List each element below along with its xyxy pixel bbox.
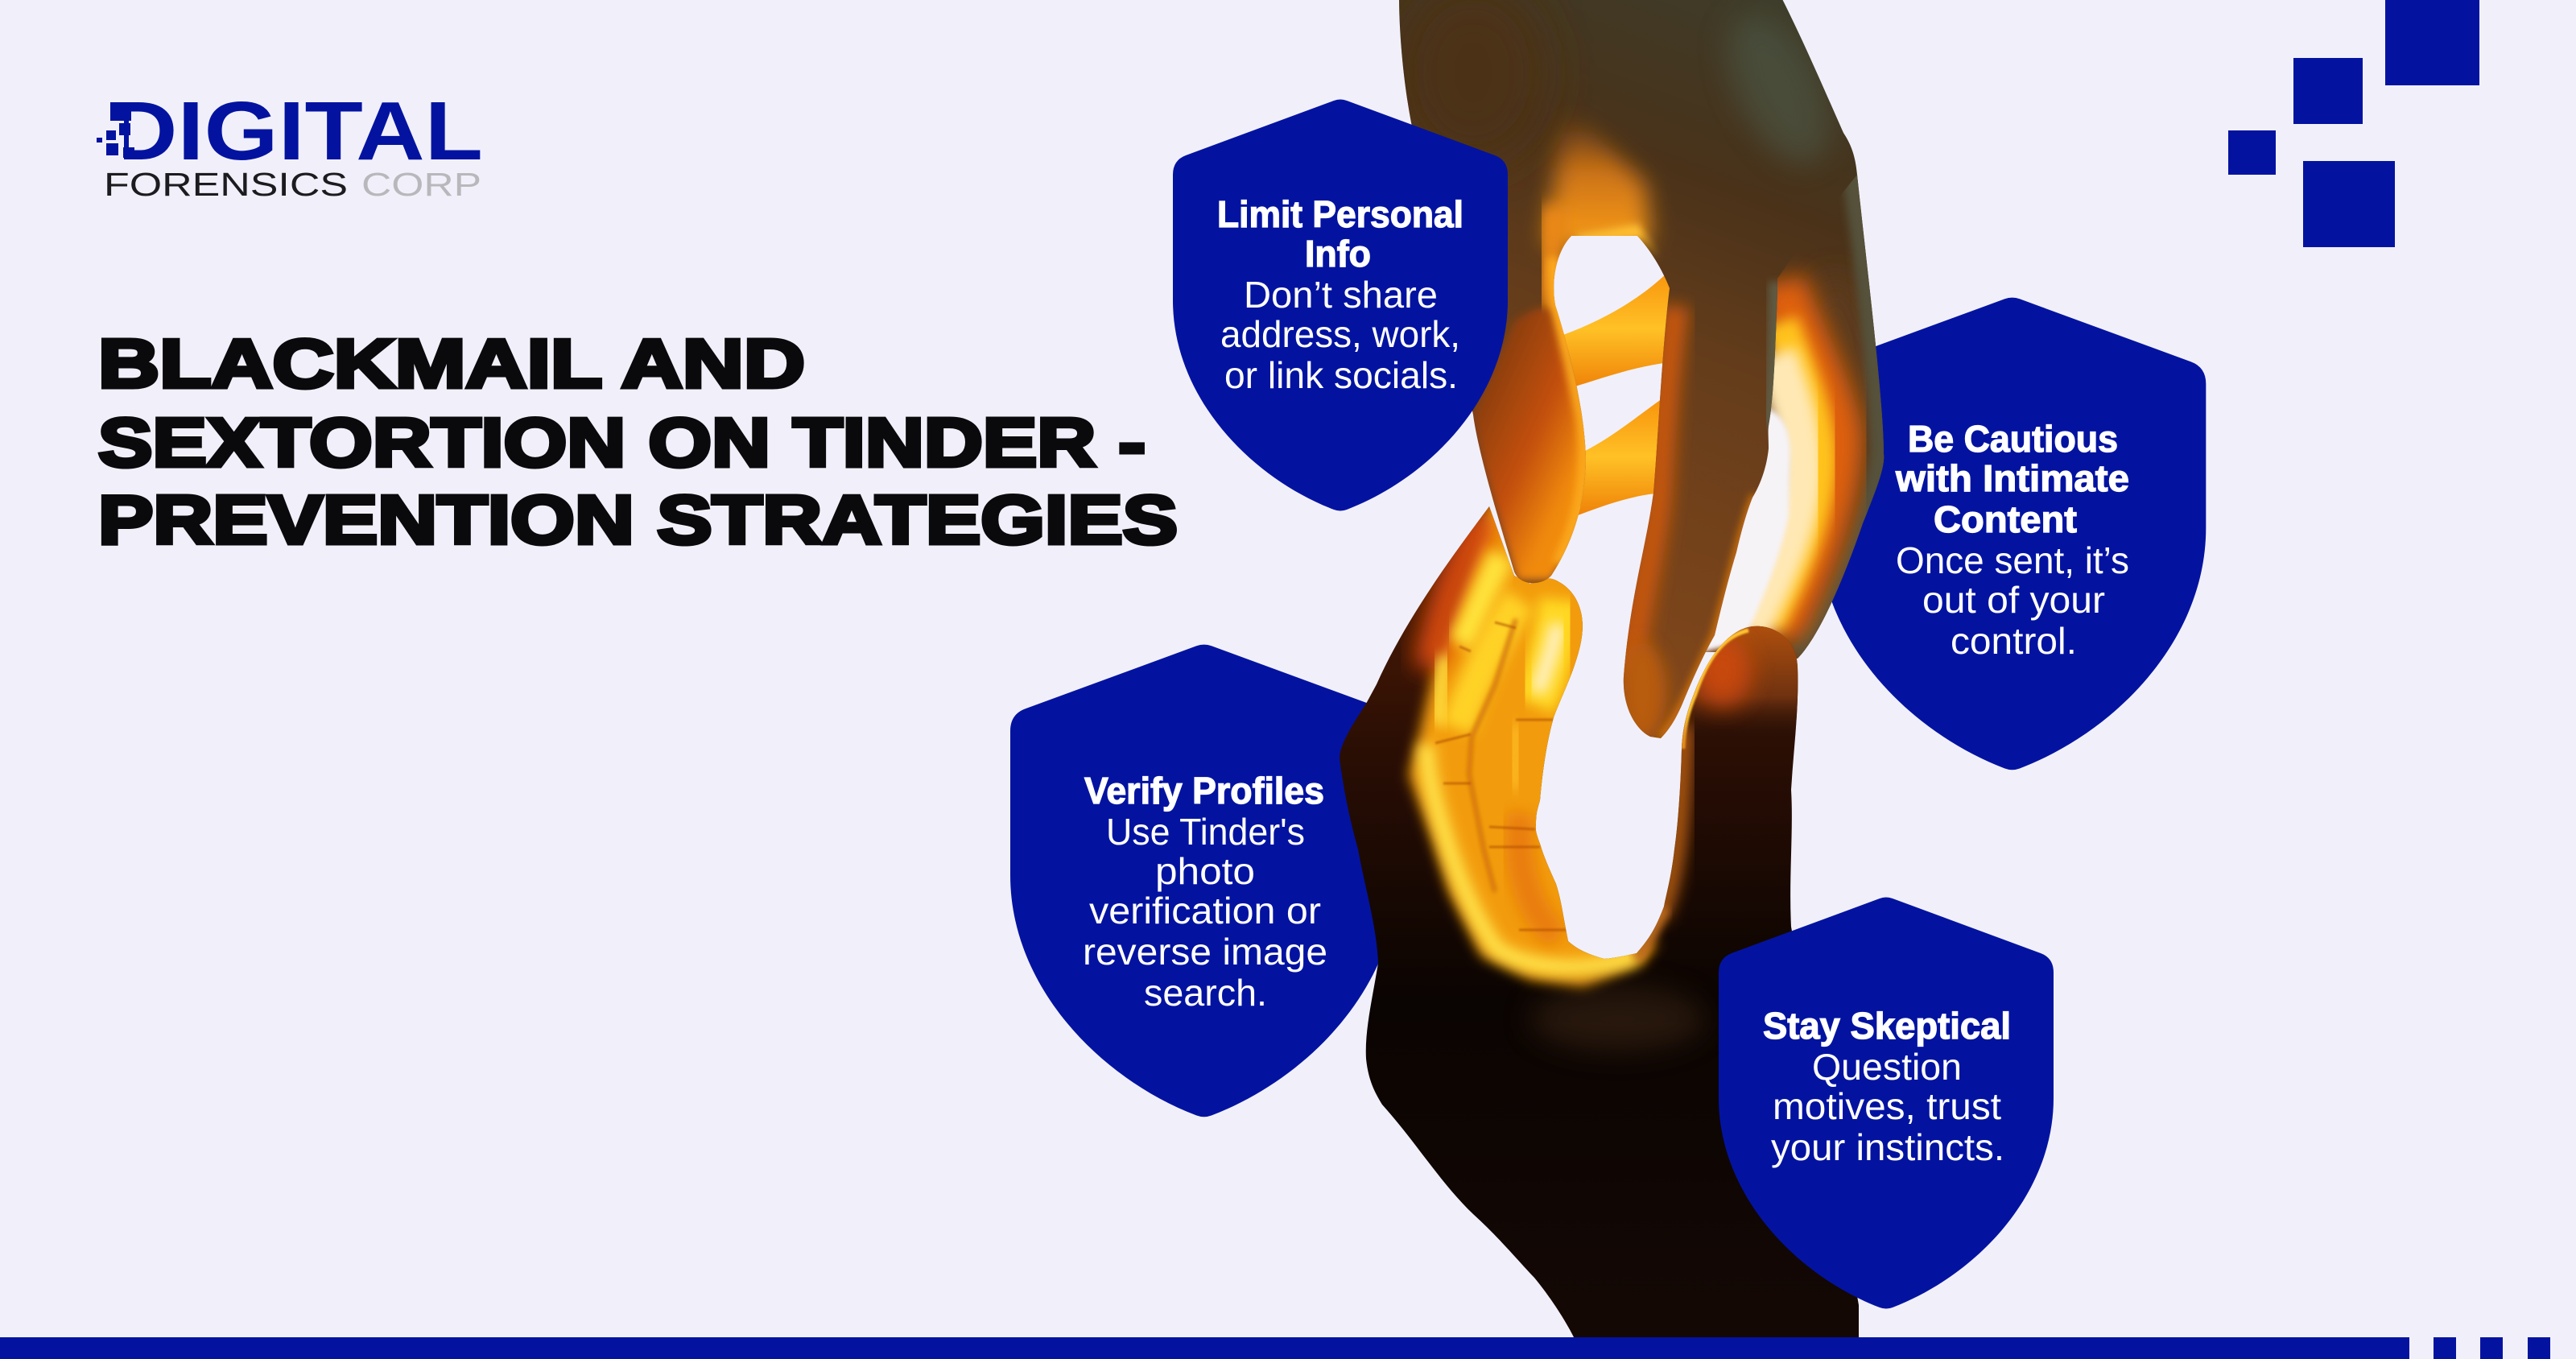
text: stay skeptical: Question bbox=[1812, 1046, 1962, 1088]
text: verify profiles: reverse image bbox=[1083, 931, 1327, 973]
bottom bar with segments bbox=[0, 1337, 2550, 1359]
text: be cautious with intimate content: out of your bbox=[1922, 579, 2105, 621]
title bbox=[98, 326, 1178, 559]
outer finger of upper hand with glow bbox=[1705, 175, 1884, 659]
title: BLACKMAIL AND bbox=[98, 326, 805, 403]
text: stay skeptical: your instincts. bbox=[1771, 1126, 2004, 1168]
text: be cautious with intimate content: Be Cautious bbox=[1908, 418, 2118, 460]
text: be cautious with intimate content: control. bbox=[1951, 620, 2077, 662]
finger highlight bbox=[1534, 600, 1562, 704]
shield: stay skeptical background bbox=[1719, 897, 2054, 1309]
lower thumb top bbox=[1683, 626, 1798, 736]
title: SEXTORTION ON TINDER - bbox=[98, 405, 1146, 481]
glowing fingers behind bbox=[1554, 270, 1670, 515]
logo bbox=[97, 85, 483, 203]
upper finger band bbox=[1461, 556, 1501, 644]
text: limit personal info: Limit Personal bbox=[1217, 193, 1463, 235]
text: limit personal info bbox=[1217, 193, 1463, 396]
text: stay skeptical bbox=[1763, 1005, 2011, 1168]
decorative squares cluster bbox=[2228, 0, 2479, 247]
text: verify profiles: Verify Profiles bbox=[1084, 770, 1324, 812]
text: verify profiles: Use Tinder's bbox=[1106, 811, 1305, 853]
finger separation and creases bbox=[1469, 619, 1516, 892]
web glow bbox=[1546, 105, 1650, 250]
text: limit personal info: or link socials. bbox=[1224, 354, 1458, 396]
shield: limit personal info background bbox=[1173, 100, 1508, 510]
logo D notch and data bits bbox=[97, 102, 134, 161]
yellow palm rim bbox=[1426, 745, 1637, 968]
lower hand bbox=[1340, 499, 1859, 1340]
shield: verify profiles background bbox=[1010, 645, 1397, 1117]
text: verify profiles: verification or bbox=[1089, 890, 1321, 931]
text: stay skeptical: Stay Skeptical bbox=[1763, 1005, 2011, 1047]
illustration: two hands with glowing light bbox=[1340, 0, 1892, 1340]
logo line: FORENSICS: FORENSICS bbox=[104, 166, 348, 203]
logo line: CORP: CORP bbox=[361, 166, 481, 203]
logo wordmark: DIGITAL: DIGITAL bbox=[109, 85, 483, 177]
title: PREVENTION STRATEGIES bbox=[98, 482, 1178, 559]
upper thumb bbox=[1473, 308, 1587, 580]
upper hand bbox=[1399, 0, 1857, 742]
text: be cautious with intimate content bbox=[1895, 418, 2129, 662]
text: verify profiles: photo bbox=[1155, 850, 1255, 892]
palm skin sheen bbox=[1530, 986, 1707, 1051]
index finger shading bbox=[1629, 306, 1676, 676]
text: verify profiles bbox=[1083, 770, 1327, 1014]
text: be cautious with intimate content: with Intimate bbox=[1895, 457, 2129, 499]
text: verify profiles: search. bbox=[1144, 972, 1267, 1014]
text: stay skeptical: motives, trust bbox=[1773, 1085, 2001, 1127]
text: limit personal info: address, work, bbox=[1220, 313, 1460, 355]
text: be cautious with intimate content: Once sent, it’s bbox=[1896, 539, 2129, 581]
text: limit personal info: Don’t share bbox=[1244, 274, 1438, 316]
text: limit personal info: Info bbox=[1305, 233, 1371, 275]
lit palm base bbox=[1409, 499, 1658, 987]
text: be cautious with intimate content: Content bbox=[1934, 498, 2077, 540]
shield: be cautious background bbox=[1818, 298, 2206, 770]
